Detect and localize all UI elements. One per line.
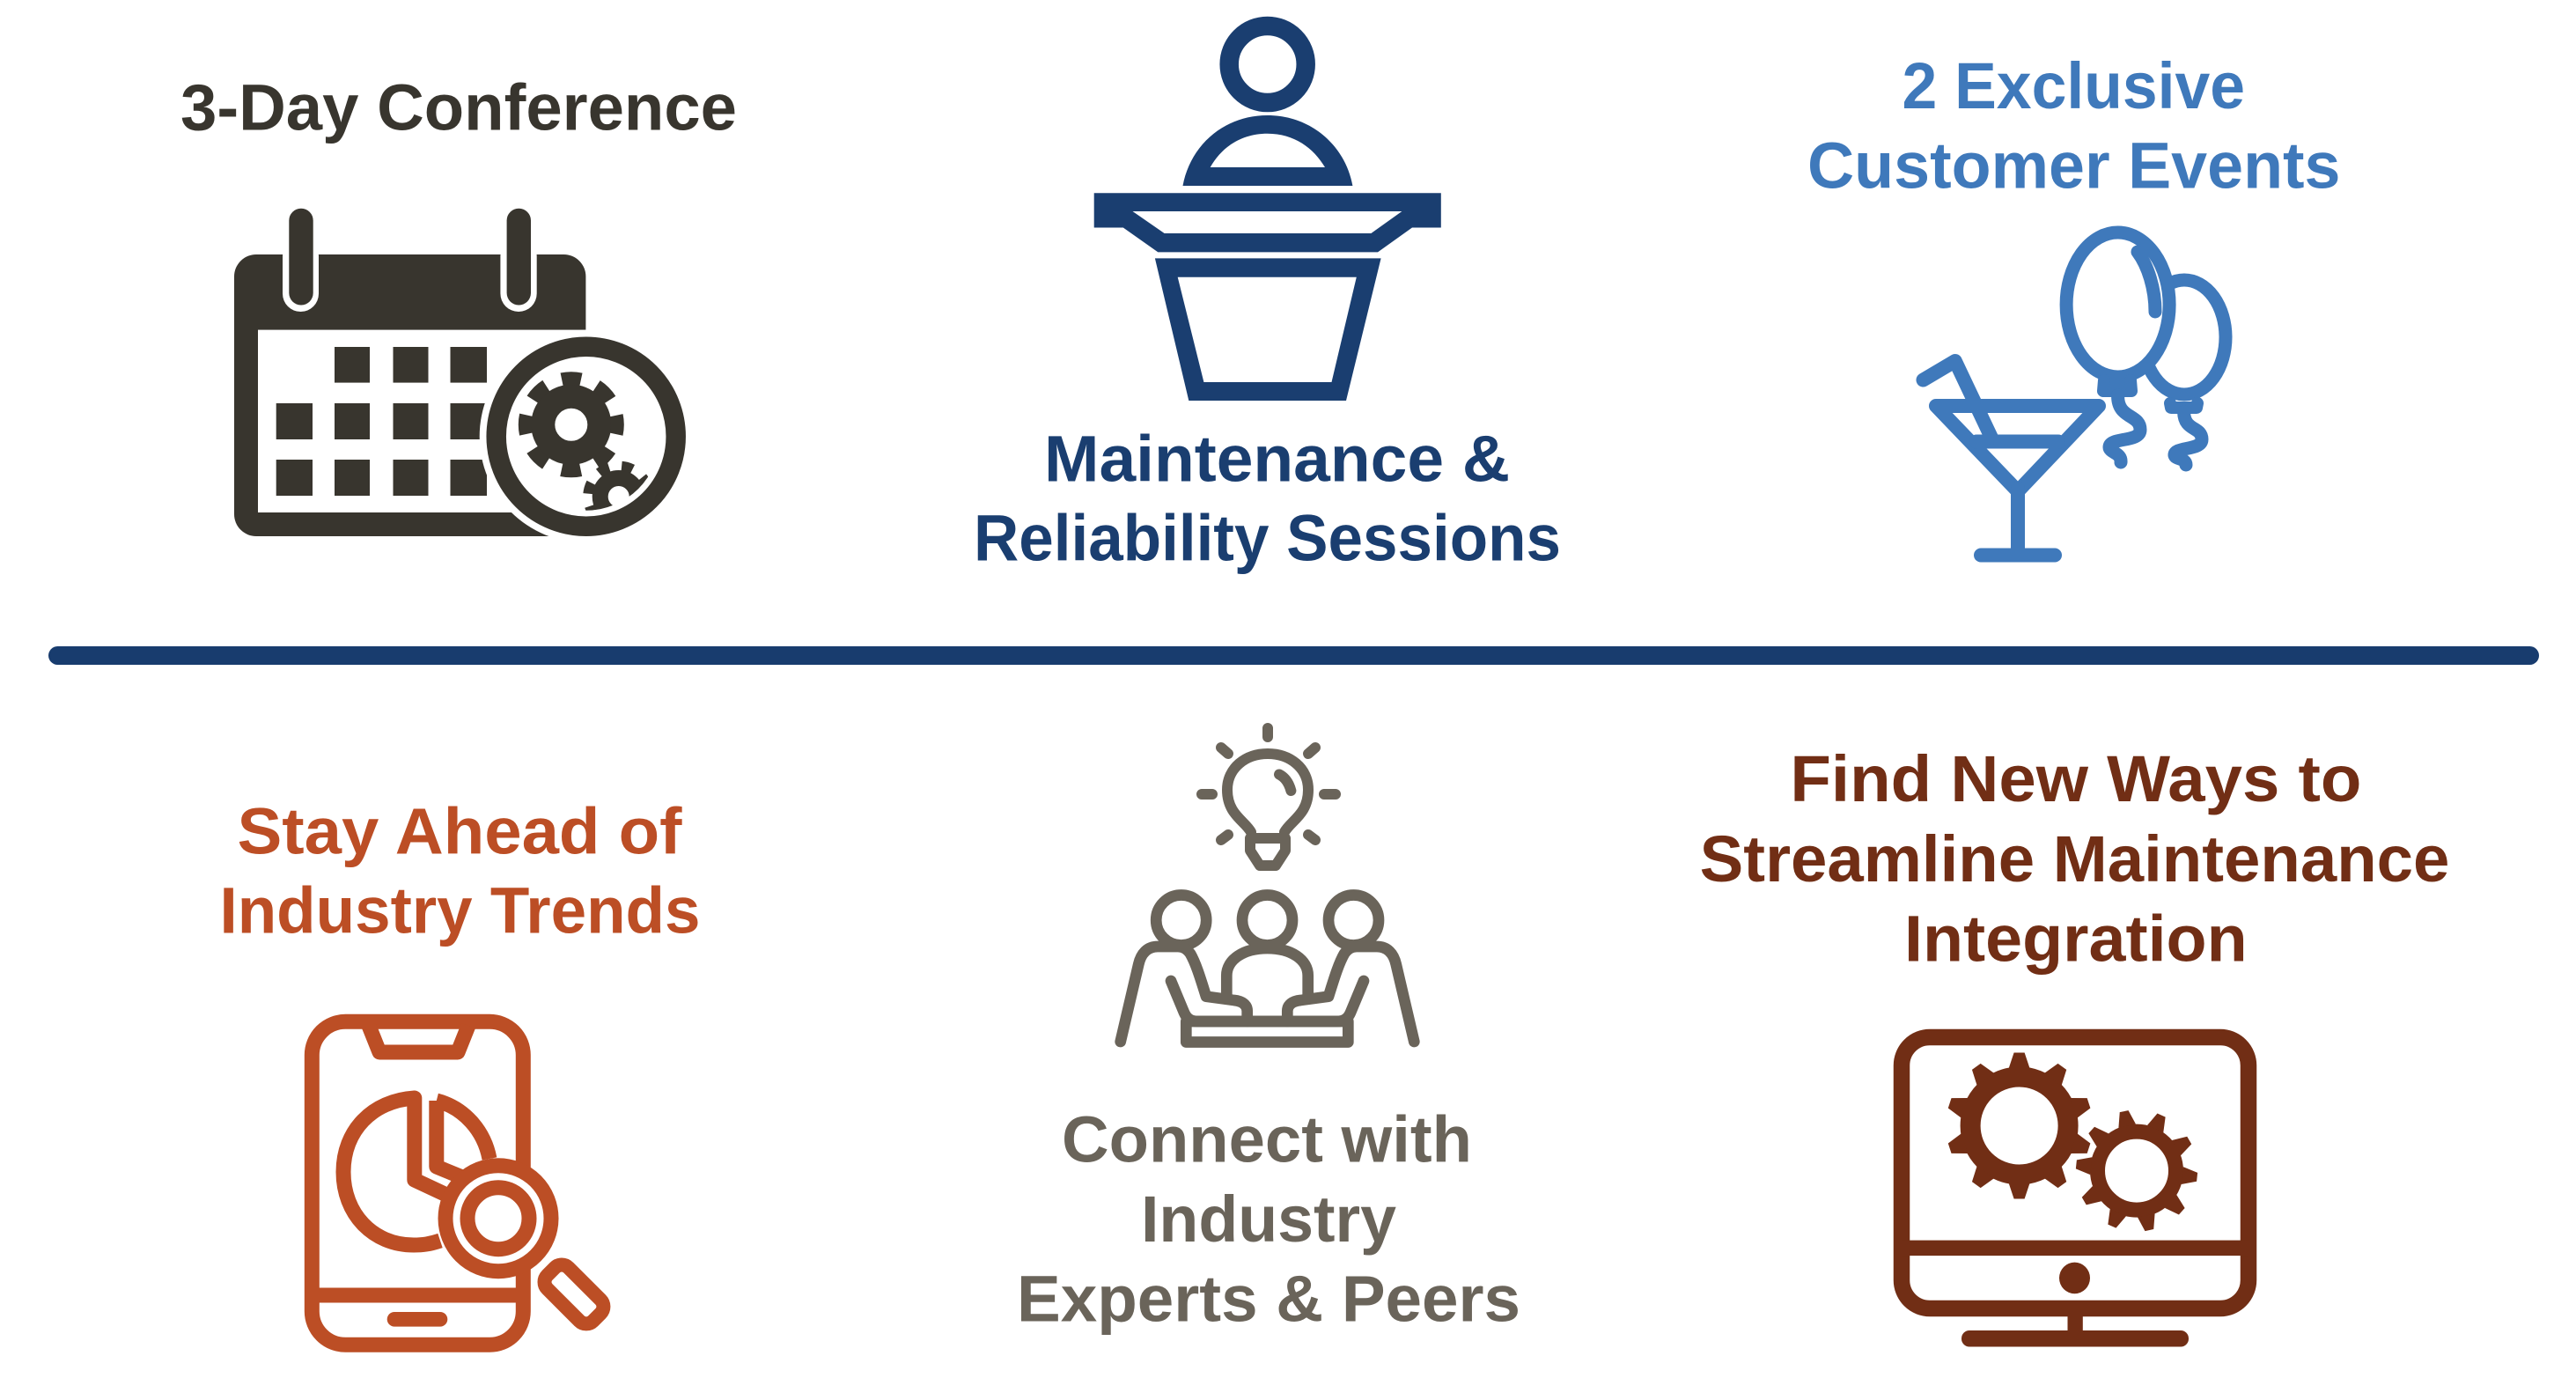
heading: Stay Ahead of Industry Trends: Stay Ahead of — [238, 795, 682, 868]
divider — [48, 646, 2539, 665]
icon: monitor with gears — [1902, 1037, 2248, 1347]
heading: Connect with Industry Experts & Peers: Connect with — [1062, 1102, 1472, 1176]
heading: Connect with Industry Experts & Peers: Experts & Peers — [1017, 1263, 1520, 1335]
heading: Find New Ways to Streamline Maintenance Integration: Find New Ways to — [1790, 742, 2361, 815]
heading: Find New Ways to Streamline Maintenance Integration: Streamline Maintenance — [1700, 822, 2449, 895]
heading: Find New Ways to Streamline Maintenance Integration — [1700, 742, 2449, 975]
panel: 3-day conference — [180, 71, 737, 543]
panel: industry trends — [220, 795, 701, 1345]
heading: Maintenance & Reliability Sessions: Reliability Sessions — [974, 502, 1561, 574]
heading: Stay Ahead of Industry Trends: Industry Trends — [220, 874, 701, 947]
heading: Maintenance & Reliability Sessions — [974, 423, 1561, 574]
panel: customer events — [1807, 49, 2340, 555]
icon: martini glass — [1923, 361, 2099, 555]
icon: phone with pie chart and magnifier — [312, 1021, 607, 1345]
icon: calendar with gears — [234, 209, 693, 543]
panel: connect with experts — [1017, 728, 1520, 1335]
icon: speaker at lectern — [1094, 26, 1441, 401]
heading: Connect with Industry Experts & Peers — [1017, 1102, 1520, 1335]
panel: maintenance and reliability sessions — [974, 26, 1561, 574]
heading: Maintenance & Reliability Sessions: Maintenance & — [1044, 423, 1510, 495]
heading: Connect with Industry Experts & Peers: Industry — [1141, 1183, 1396, 1256]
heading: 2 Exclusive Customer Events — [1807, 49, 2340, 203]
heading: 3-Day Conference: 3-Day Conference — [180, 71, 737, 144]
panel: streamline maintenance integration — [1700, 742, 2449, 1347]
heading: Find New Ways to Streamline Maintenance Integration: Integration — [1904, 902, 2248, 975]
heading: 2 Exclusive Customer Events: 2 Exclusive — [1902, 49, 2245, 122]
heading: Stay Ahead of Industry Trends — [220, 795, 701, 947]
icon: light bulb — [1202, 728, 1336, 866]
icon: three people at a table — [1121, 895, 1414, 1043]
heading: 2 Exclusive Customer Events: Customer Events — [1807, 129, 2340, 203]
icon: balloons — [2066, 232, 2226, 465]
